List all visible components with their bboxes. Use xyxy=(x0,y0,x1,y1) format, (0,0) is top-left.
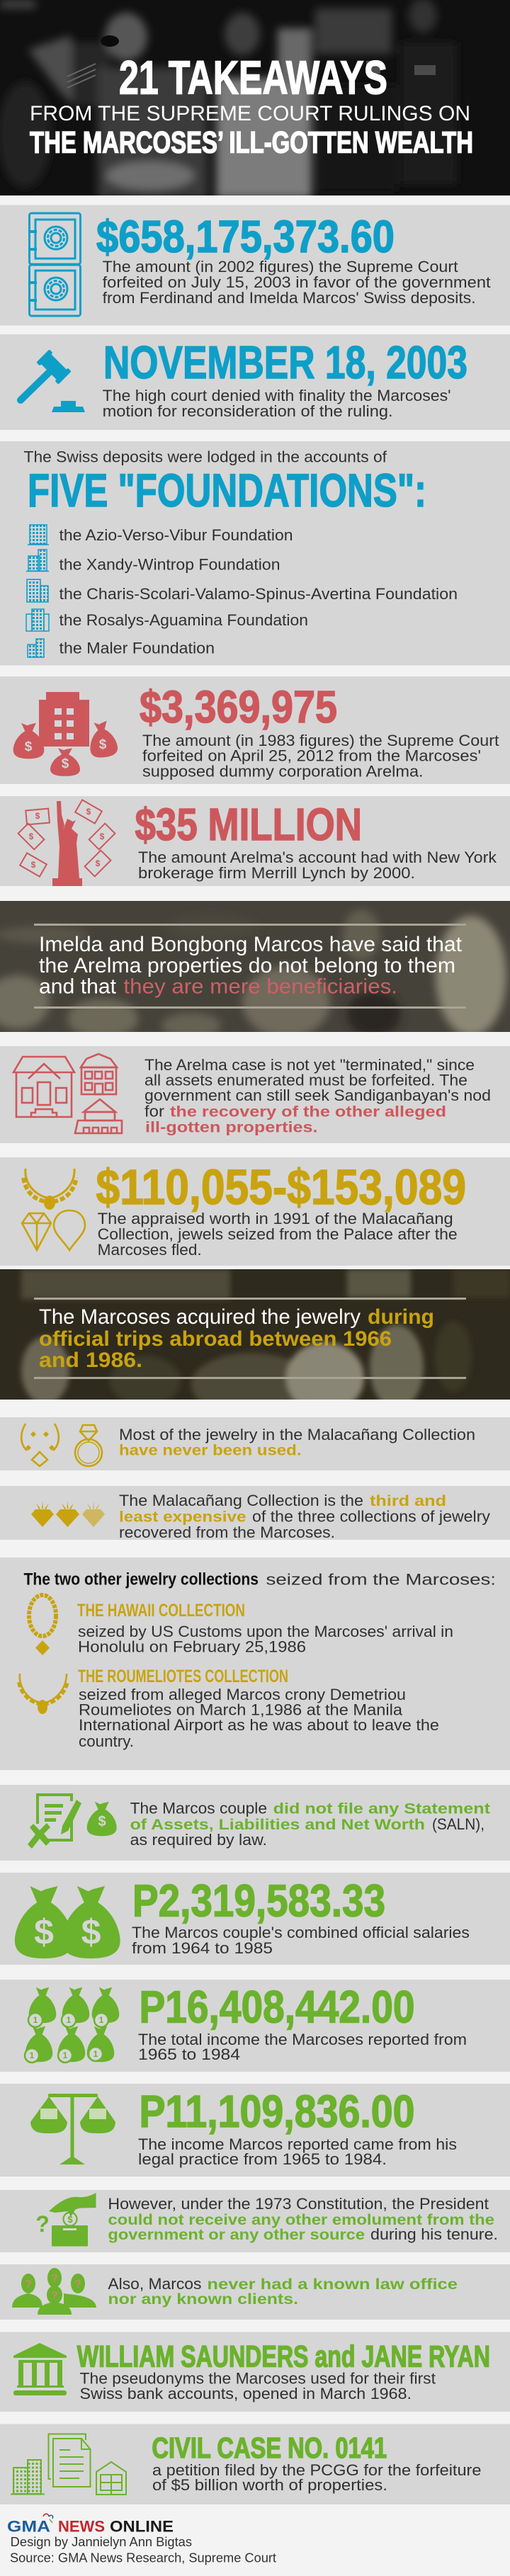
quote text: and that xyxy=(39,975,117,999)
icon: statue of liberty with bills: $ xyxy=(86,807,91,817)
sepia background photo xyxy=(0,901,510,1038)
description: of Assets, Liabilities and Net Worth xyxy=(130,1816,425,1833)
icon: building with money bags xyxy=(13,692,119,776)
description: Swiss bank accounts, opened in March 1968. xyxy=(79,2385,412,2402)
panel: no SALN xyxy=(0,1785,510,1861)
description: legal practice from 1965 to 1984. xyxy=(138,2150,387,2168)
icon: six bags with coins: 1 xyxy=(33,2015,38,2025)
icon: two money bags: $ xyxy=(34,1912,54,1952)
rule xyxy=(34,1377,466,1379)
description: a petition filed by the PCGG for the forfeiture xyxy=(152,2461,482,2479)
sepia background photo xyxy=(0,1269,510,1400)
foundation name 2: the Xandy-Wintrop Foundation xyxy=(60,556,280,574)
icon: houses xyxy=(13,1054,122,1133)
description: government can still seek Sandiganbayan's nod xyxy=(144,1086,491,1104)
logo: GMA News Online: ONLINE xyxy=(110,2517,174,2536)
panel: 1973 Constitution xyxy=(0,2190,510,2252)
description: motion for reconsideration of the ruling. xyxy=(103,402,393,420)
heading: amount: P2,319,583.33 xyxy=(132,1876,385,1927)
icon: document, pencil, bag: $ xyxy=(98,1814,106,1829)
heading: amount: $658,175,373.60 xyxy=(96,211,395,262)
icon: beaded necklace xyxy=(29,1595,56,1655)
description: The Arelma case is not yet "terminated," since xyxy=(144,1056,475,1074)
heading: amount: $3,369,975 xyxy=(140,681,337,732)
panel: pseudonyms xyxy=(0,2332,510,2412)
description xyxy=(138,849,497,882)
description: least expensive xyxy=(119,1509,246,1526)
icon: hand dropping coin in box: $ xyxy=(67,2214,73,2225)
icon: statue of liberty with bills: $ xyxy=(29,832,34,841)
description xyxy=(103,258,491,307)
title: FROM THE SUPREME COURT RULINGS ON xyxy=(30,102,470,125)
description: all assets enumerated must be forfeited. The xyxy=(144,1072,468,1089)
heading: amount: P11,109,836.00 xyxy=(139,2086,415,2137)
quote text: they are mere beneficiaries. xyxy=(123,975,397,999)
icon: six bags with coins: 1 xyxy=(63,2050,68,2060)
icon: statue of liberty with bills: $ xyxy=(100,832,105,841)
Hawaii collection: seized by US Customs upon the Marcoses' arrival in xyxy=(78,1623,453,1640)
icon: bank xyxy=(13,2343,67,2395)
icon: six bags with coins: 1 xyxy=(30,2050,35,2060)
intro text: The Swiss deposits were lodged in the accounts of xyxy=(24,448,387,465)
description: The income Marcos reported came from his xyxy=(138,2135,457,2153)
quote text: official trips abroad between 1966 xyxy=(39,1327,392,1351)
panel: Swiss deposit amount xyxy=(0,205,510,326)
quote text: and 1986. xyxy=(39,1349,142,1372)
description xyxy=(108,2275,458,2308)
quote text: during xyxy=(368,1305,434,1329)
description: of $5 billion worth of properties. xyxy=(152,2476,387,2494)
hero header xyxy=(0,0,510,198)
heading: amount: P16,408,442.00 xyxy=(139,1982,415,2033)
description: The pseudonyms the Marcoses used for their first xyxy=(79,2369,436,2387)
icon: hand dropping coin in box: ? xyxy=(35,2211,50,2237)
description: The amount (in 1983 figures) the Supreme Court xyxy=(142,732,499,749)
description: The amount Arelma's account had with New York xyxy=(138,849,497,866)
description xyxy=(108,2195,498,2243)
panel: never been used xyxy=(0,1417,510,1470)
credits: Design by Jannielyn Ann Bigtas xyxy=(11,2535,192,2549)
panel: official salaries xyxy=(0,1873,510,1965)
foundation name 4: the Rosalys-Aguamina Foundation xyxy=(60,611,308,629)
icon: six bags with coins xyxy=(25,1987,119,2062)
Roumeliotes collection: country. xyxy=(79,1732,134,1750)
foundation name 1: the Azio-Verso-Vibur Foundation xyxy=(60,526,293,544)
description: The appraised worth in 1991 of the Malacañang xyxy=(98,1210,453,1227)
foundation name 5: the Maler Foundation xyxy=(60,639,215,657)
description xyxy=(144,1056,491,1136)
quote text: The Marcoses acquired the jewelry xyxy=(39,1305,361,1329)
description: The Marcos couple xyxy=(130,1800,267,1817)
description: forfeited on July 15, 2003 in favor of the government xyxy=(103,273,491,291)
description xyxy=(132,1924,470,1957)
title xyxy=(30,51,473,160)
description xyxy=(119,1492,490,1541)
panel: two other jewelry collections xyxy=(0,1557,510,1770)
description xyxy=(98,1210,458,1259)
description xyxy=(152,2461,482,2494)
panel: civil case xyxy=(0,2424,510,2504)
title: 21 TAKEAWAYS xyxy=(119,51,387,105)
description xyxy=(138,2135,457,2168)
icon: two money bags: $ xyxy=(81,1912,101,1952)
icon: two money bags xyxy=(15,1886,120,1958)
list of foundations xyxy=(26,525,458,657)
panel: Malacañang collection worth xyxy=(0,1157,510,1266)
panel: no law office xyxy=(0,2264,510,2320)
description: The amount (in 2002 figures) the Supreme Court xyxy=(103,258,458,276)
description: nor any known clients. xyxy=(108,2291,298,2308)
description: could not receive any other emolument from the xyxy=(108,2211,494,2228)
panel: 35 million xyxy=(0,796,510,886)
quote text xyxy=(39,933,463,999)
description: of the three collections of jewelry xyxy=(252,1508,490,1526)
description: The total income the Marcoses reported from xyxy=(138,2031,467,2048)
description xyxy=(130,1800,490,1849)
icon: building with money bags: $ xyxy=(99,737,107,752)
description: 1965 to 1984 xyxy=(138,2046,240,2063)
icon: building 2 xyxy=(26,550,49,571)
icon: statue of liberty with bills: $ xyxy=(96,858,101,868)
description: (SALN), xyxy=(432,1815,484,1833)
icon: six bags with coins: 1 xyxy=(94,2049,98,2059)
panel: third and least expensive xyxy=(0,1486,510,1541)
description: the recovery of the other alleged xyxy=(170,1103,446,1120)
Roumeliotes collection xyxy=(78,1667,439,1750)
icon: necklace and ring xyxy=(21,1424,102,1466)
icon: statue of liberty with bills: $ xyxy=(31,860,36,870)
icon: unknown clients xyxy=(12,2268,96,2315)
icon: two safes xyxy=(30,213,81,316)
hero background photo xyxy=(0,0,510,198)
icon: building 4 xyxy=(26,609,49,631)
rule xyxy=(34,924,466,926)
icon: building 1 xyxy=(28,525,49,545)
panel: total income xyxy=(0,1980,510,2072)
heading: amount: $35 MILLION xyxy=(135,799,362,850)
Hawaii collection xyxy=(77,1601,453,1656)
icon: pendant necklace xyxy=(19,1674,67,1714)
section heading: The two other jewelry collections xyxy=(24,1570,259,1589)
heading: case number: CIVIL CASE NO. 0141 xyxy=(152,2432,387,2464)
panel: photo quote on jewelry trips xyxy=(0,1269,510,1400)
description: Most of the jewelry in the Malacañang Collection xyxy=(119,1426,475,1443)
description xyxy=(119,1426,475,1459)
Roumeliotes collection: International Airport as he was about to leave the xyxy=(79,1716,439,1734)
credits: Source: GMA News Research, Supreme Court xyxy=(10,2551,276,2565)
foundation name 3: the Charis-Scolari-Valamo-Spinus-Avertina Foundation xyxy=(60,585,458,603)
description: never had a known law office xyxy=(207,2276,458,2293)
icon: three diamonds xyxy=(31,1501,105,1527)
icon: unknown clients: ? xyxy=(51,2290,58,2302)
rule xyxy=(34,1298,466,1300)
description: forfeited on April 25, 2012 from the Marcoses' xyxy=(142,747,481,765)
icon: jewelry xyxy=(22,1169,85,1250)
panel: photo quote on Arelma properties xyxy=(0,901,510,1038)
icon: unknown clients: ? xyxy=(25,2279,32,2291)
description: Collection, jewels seized from the Palace after the xyxy=(98,1225,458,1243)
icon: six bags with coins: 1 xyxy=(99,2015,104,2025)
description: recovered from the Marcoses. xyxy=(119,1524,335,1541)
icon: building with money bags: $ xyxy=(62,756,69,771)
panel: legal practice income xyxy=(0,2084,510,2177)
icon: building 3 xyxy=(27,579,48,602)
description: ill-gotten properties. xyxy=(145,1119,317,1136)
description: have never been used. xyxy=(119,1442,302,1459)
Roumeliotes collection: seized from alleged Marcos crony Demetriou xyxy=(79,1686,406,1703)
description xyxy=(103,387,451,420)
icon: unknown clients: ? xyxy=(51,2273,58,2285)
icon: unknown clients: ? xyxy=(74,2279,81,2291)
description: supposed dummy corporation Arelma. xyxy=(142,762,424,781)
description: for xyxy=(144,1102,164,1120)
quote text xyxy=(39,1305,434,1372)
icon: six bags with coins: 1 xyxy=(67,2015,72,2025)
logo: GMA News Online: GMA xyxy=(7,2517,50,2536)
rule xyxy=(34,1006,466,1009)
panel: Arelma amount xyxy=(0,676,510,784)
panel: five foundations xyxy=(0,441,510,666)
icon: documents and buildings xyxy=(11,2434,126,2495)
icon: statue of liberty with bills xyxy=(18,800,115,886)
description: Also, Marcos xyxy=(108,2275,201,2293)
icon: building with money bags: $ xyxy=(25,739,33,754)
icon: scale xyxy=(30,2094,115,2164)
icon: building 5 xyxy=(28,639,44,657)
logo: GMA News Online: NEWS xyxy=(58,2517,105,2536)
description: The high court denied with finality the Marcoses' xyxy=(103,387,451,404)
quote text: Imelda and Bongbong Marcos have said that xyxy=(39,933,463,956)
quote text: the Arelma properties do not belong to them xyxy=(39,954,455,977)
section heading xyxy=(24,1570,496,1589)
logo: GMA News Online xyxy=(7,2514,174,2536)
description: government or any other source xyxy=(108,2226,365,2243)
icon: gavel xyxy=(21,349,85,412)
description: brokerage firm Merrill Lynch by 2000. xyxy=(138,864,415,882)
Roumeliotes collection: THE ROUMELIOTES COLLECTION xyxy=(78,1667,288,1686)
description: did not file any Statement xyxy=(273,1800,490,1817)
description: during his tenure. xyxy=(370,2225,498,2243)
Hawaii collection: Honolulu on February 25,1986 xyxy=(78,1638,306,1656)
Hawaii collection: THE HAWAII COLLECTION xyxy=(77,1601,245,1621)
Roumeliotes collection: Roumeliotes on March 1,1986 at the Manila xyxy=(79,1701,403,1718)
description: The Marcos couple's combined official salaries xyxy=(132,1924,470,1941)
description xyxy=(142,732,499,781)
description: third and xyxy=(370,1492,446,1509)
icon: document, pencil, bag xyxy=(28,1795,117,1849)
description: However, under the 1973 Constitution, the President xyxy=(108,2195,489,2213)
icon: hand dropping coin in box xyxy=(35,2193,96,2247)
footer xyxy=(7,2514,276,2565)
description xyxy=(138,2031,467,2063)
description: Marcoses fled. xyxy=(98,1241,202,1259)
section heading: seized from the Marcoses: xyxy=(266,1571,496,1589)
description xyxy=(79,2369,436,2402)
icon: statue of liberty with bills: $ xyxy=(35,811,40,821)
panel: Arelma case not terminated xyxy=(0,1046,510,1143)
description: as required by law. xyxy=(130,1831,267,1849)
description: The Malacañang Collection is the xyxy=(119,1492,363,1509)
panel: November 18, 2003 xyxy=(0,334,510,430)
credits xyxy=(10,2535,276,2565)
description: from Ferdinand and Imelda Marcos' Swiss deposits. xyxy=(103,289,476,307)
description: from 1964 to 1985 xyxy=(132,1939,273,1957)
